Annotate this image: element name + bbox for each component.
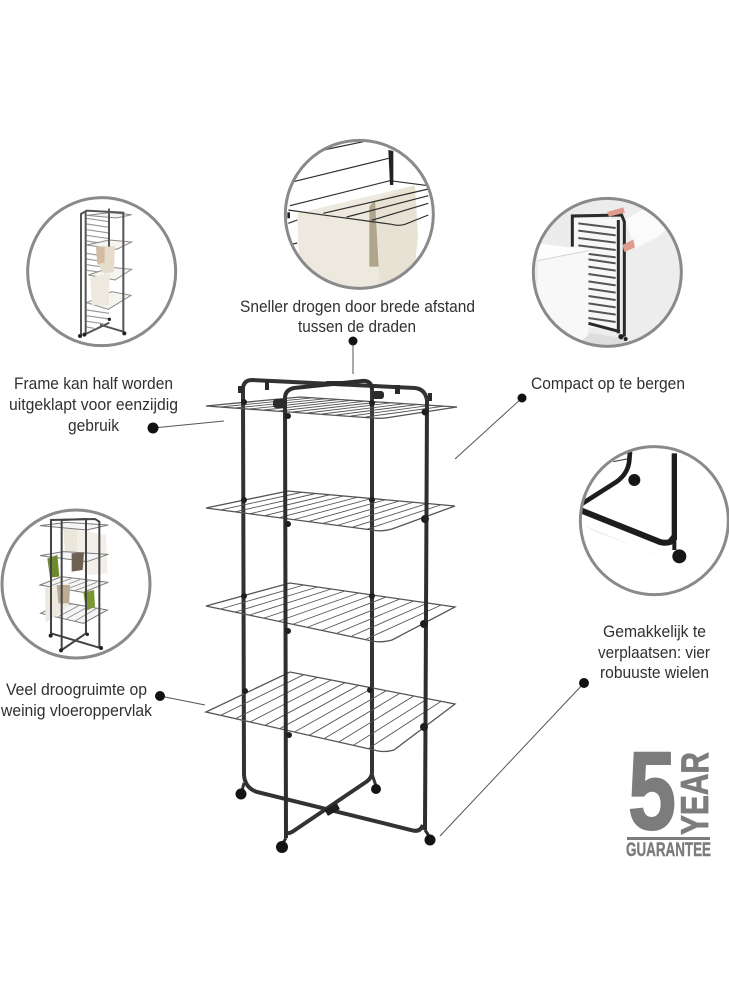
photo circle: rack loaded with laundry [2,510,150,658]
pointer: half unfolded frame [148,421,224,434]
pole joints [241,399,429,816]
wire shelf 2 [206,491,455,531]
label: drying space: Veel droogruimte op [6,680,147,699]
label: wheels [598,622,710,682]
label: half unfolded frame: uitgeklapt voor eenzijdig [9,395,178,414]
wire shelf 3 [206,583,455,642]
photo circle: wide wire spacing detail [285,140,433,292]
label: half unfolded frame [9,374,178,435]
photo circle: half unfolded frame [28,198,176,346]
castor wheels [236,784,436,853]
label: wire spacing: tussen de draden [298,317,416,336]
wire shelf 4 [206,672,455,752]
main product: four-tier drying rack [206,380,457,853]
label: half unfolded frame: Frame kan half worden [14,374,173,393]
photo circle: wheel detail [580,447,728,595]
pointer: wheels [440,678,589,836]
rear frame poles [242,380,427,833]
badge: 5 year guarantee: 5 [628,730,676,853]
front frame poles [283,381,429,843]
pointer: drying space [155,691,205,705]
label: drying space: weinig vloeroppervlak [0,701,152,720]
badge: 5 year guarantee [626,730,717,861]
wire shelf 1 [206,397,457,418]
label: wheels: verplaatsen: vier [598,643,710,662]
label: half unfolded frame: gebruik [68,416,119,435]
photo circle: compact storage beside cabinet [533,197,685,350]
label: drying space [0,680,152,720]
label: wire spacing: Sneller drogen door brede afstand [240,297,475,316]
label: wire spacing [240,297,475,336]
label: wheels: robuuste wielen [600,663,709,682]
badge: 5 year guarantee: YEAR [674,752,717,835]
infographic canvas [0,138,729,856]
top connector and clips [238,381,432,408]
pointer: wire spacing [348,336,358,374]
label: wheels: Gemakkelijk te [603,622,706,641]
label: compact storage: Compact op te bergen [531,374,685,393]
pointer: compact storage [455,394,526,459]
